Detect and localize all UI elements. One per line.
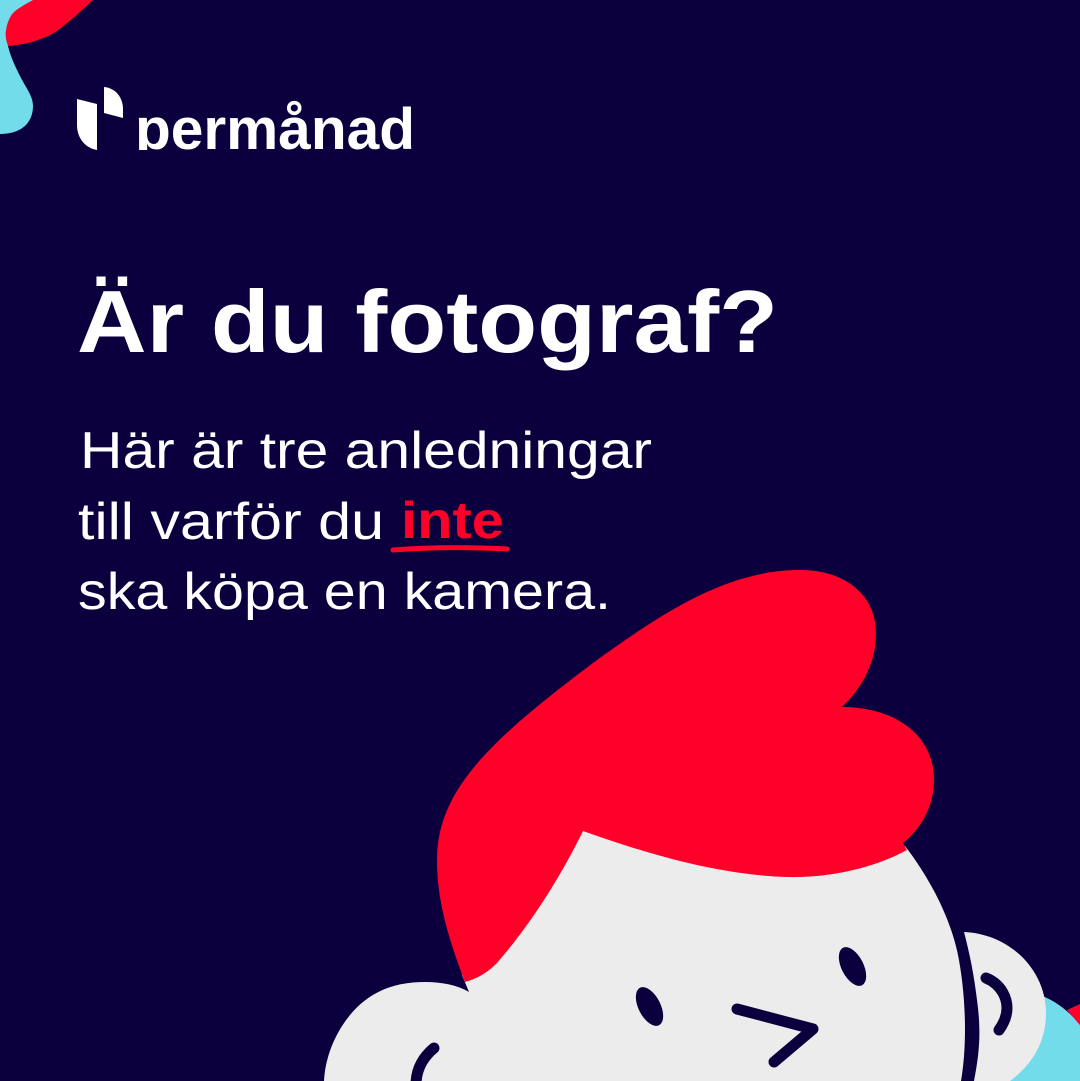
logo: Permånad (77, 87, 412, 150)
corner blobs: top left (0, 0, 93, 134)
cyan shape behind head (1000, 995, 1080, 1081)
red corner accent (1067, 1004, 1080, 1025)
left inner ear (416, 1048, 434, 1081)
highlighted word: inte: inte (401, 492, 504, 550)
right eye (833, 943, 872, 990)
subtitle text block: ska köpa en kamera. (78, 563, 611, 621)
hair (437, 570, 934, 982)
subtitle text block (78, 422, 652, 621)
subtitle text block: Här är tre anledningar (80, 422, 652, 480)
illustration: character (324, 570, 1080, 1081)
left eye (630, 983, 669, 1030)
right inner ear (986, 978, 1007, 1030)
title: Är du fotograf? (77, 272, 778, 371)
face (420, 830, 965, 1081)
left ear (324, 982, 520, 1081)
logo mark (77, 87, 123, 150)
subtitle text block: till varför du (78, 493, 384, 551)
nose (737, 1009, 813, 1062)
right ear (964, 932, 1046, 1081)
logo wordmark: permånad (135, 97, 415, 162)
